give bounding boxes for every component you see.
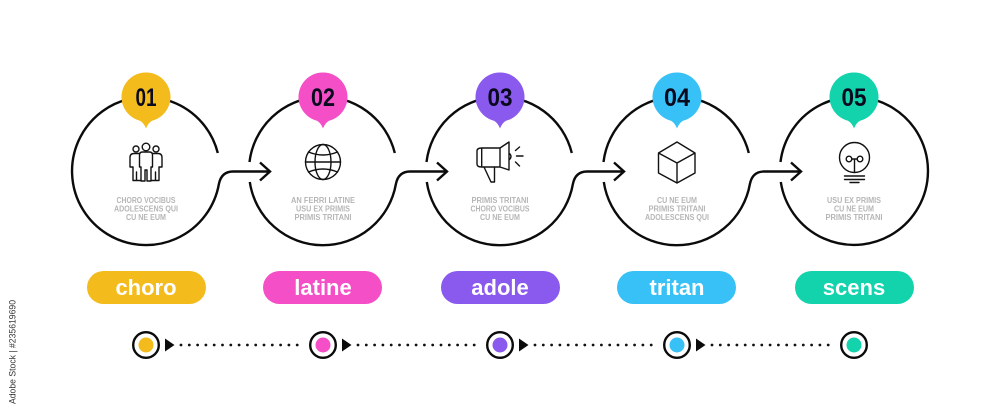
label pill: tritan [617,271,736,304]
label pill: scens: scens [823,275,885,300]
text block 3: CU NE EUM [480,213,520,222]
pin 03 [475,72,524,128]
timeline node 4 [664,332,690,358]
text block 2: AN FERRI LATINE [291,196,355,205]
circle and connector arrow 3 [426,97,624,245]
timeline connector 4 [696,338,835,352]
step 3 [426,72,624,245]
timeline node 3 [487,332,513,358]
pin 05 [829,72,878,128]
label pill: choro: choro [115,275,177,300]
icon: megaphone [477,142,523,182]
text block 4: ADOLESCENS QUI [645,213,709,222]
label pill: latine [263,271,382,304]
text block 1: ADOLESCENS QUI [114,204,178,214]
label pill: adole: adole [471,275,529,300]
icon: globe [306,144,340,180]
text block 3 [470,196,530,222]
text block 5: PRIMIS TRITANI [826,213,882,222]
text block 1 [114,196,178,222]
text block 2: PRIMIS TRITANI [294,213,352,222]
text block 1: CU NE EUM [126,213,166,222]
text block 4: PRIMIS TRITANI [648,204,706,214]
pin 03: 03 [488,84,512,112]
vertical stock credit: Adobe Stock | #235619690 [8,300,18,404]
pin 02 [298,72,347,128]
icon: people [130,143,162,181]
step 4 [604,72,801,245]
text block 2 [291,196,355,222]
timeline connector 1 [165,338,304,352]
text block 5: USU EX PRIMIS [827,196,881,205]
label pill: adole [441,271,560,304]
label pill: latine: latine [294,275,352,300]
pin 05: 05 [842,84,867,112]
text block 1: CHORO VOCIBUS [116,196,176,205]
step 2 [250,72,447,245]
text block 3: CHORO VOCIBUS [470,204,530,214]
timeline node 1 [133,332,159,358]
circle and connector arrow 1 [72,97,270,245]
timeline [133,332,867,358]
label pill: scens [795,271,914,304]
text block 5 [826,196,882,222]
text block 5: CU NE EUM [834,204,874,214]
circle and connector arrow 4 [604,97,801,245]
pin 04: 04 [664,84,690,112]
timeline node 5 [841,332,867,358]
timeline node 2 [310,332,336,358]
text block 4 [645,196,709,222]
icon: light bulb [840,142,870,182]
timeline connector 3 [519,338,658,352]
step 5 [780,72,928,245]
label pill: choro [87,271,206,304]
text block 2: USU EX PRIMIS [296,204,350,214]
timeline connector 2 [342,338,481,352]
step 1 [72,72,270,245]
circle and connector arrow 2 [250,97,447,245]
pin 01 [122,72,170,128]
pin 04 [652,72,702,128]
text block 3: PRIMIS TRITANI [472,196,528,205]
pin 02: 02 [311,84,335,112]
circle 5 [780,97,928,245]
text block 4: CU NE EUM [657,196,697,205]
icon: cube [658,142,695,183]
pin 01: 01 [136,84,157,112]
label pill: tritan: tritan [650,275,704,300]
